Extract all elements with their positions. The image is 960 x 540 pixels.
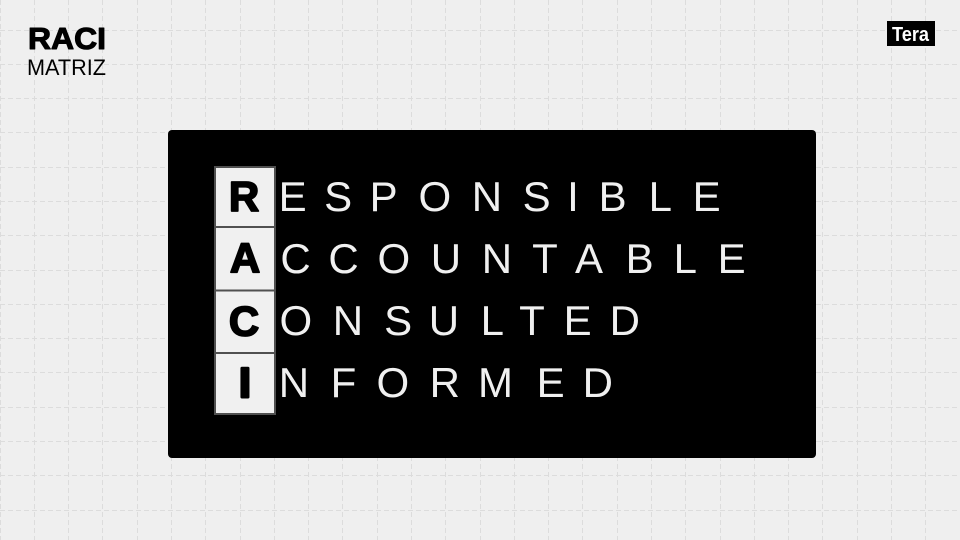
subheading: MATRIZ: MATRIZ: [27, 55, 106, 80]
letter box: A: A: [230, 234, 260, 282]
letter box: I: I: [239, 359, 251, 406]
text: ACCOUNTABLE: CCOUNTABLE: [280, 235, 746, 282]
text: INFORMED: NFORMED: [279, 359, 613, 406]
logo: Tera: Tera: [892, 24, 930, 46]
letter box: I: [215, 353, 275, 414]
letter box: A: [215, 227, 275, 290]
title: RACI MATRIZ: [27, 21, 106, 80]
letter box: C: [215, 290, 275, 353]
text: RESPONSIBLE: ESPONSIBLE: [279, 173, 721, 220]
panel: RACI acronym: [168, 130, 816, 458]
text: CONSULTED: ONSULTED: [280, 297, 640, 344]
letter box: R: [215, 167, 275, 227]
heading: RACI: RACI: [28, 21, 106, 56]
letter box: C: C: [229, 298, 259, 344]
letter box: R: R: [229, 173, 259, 220]
